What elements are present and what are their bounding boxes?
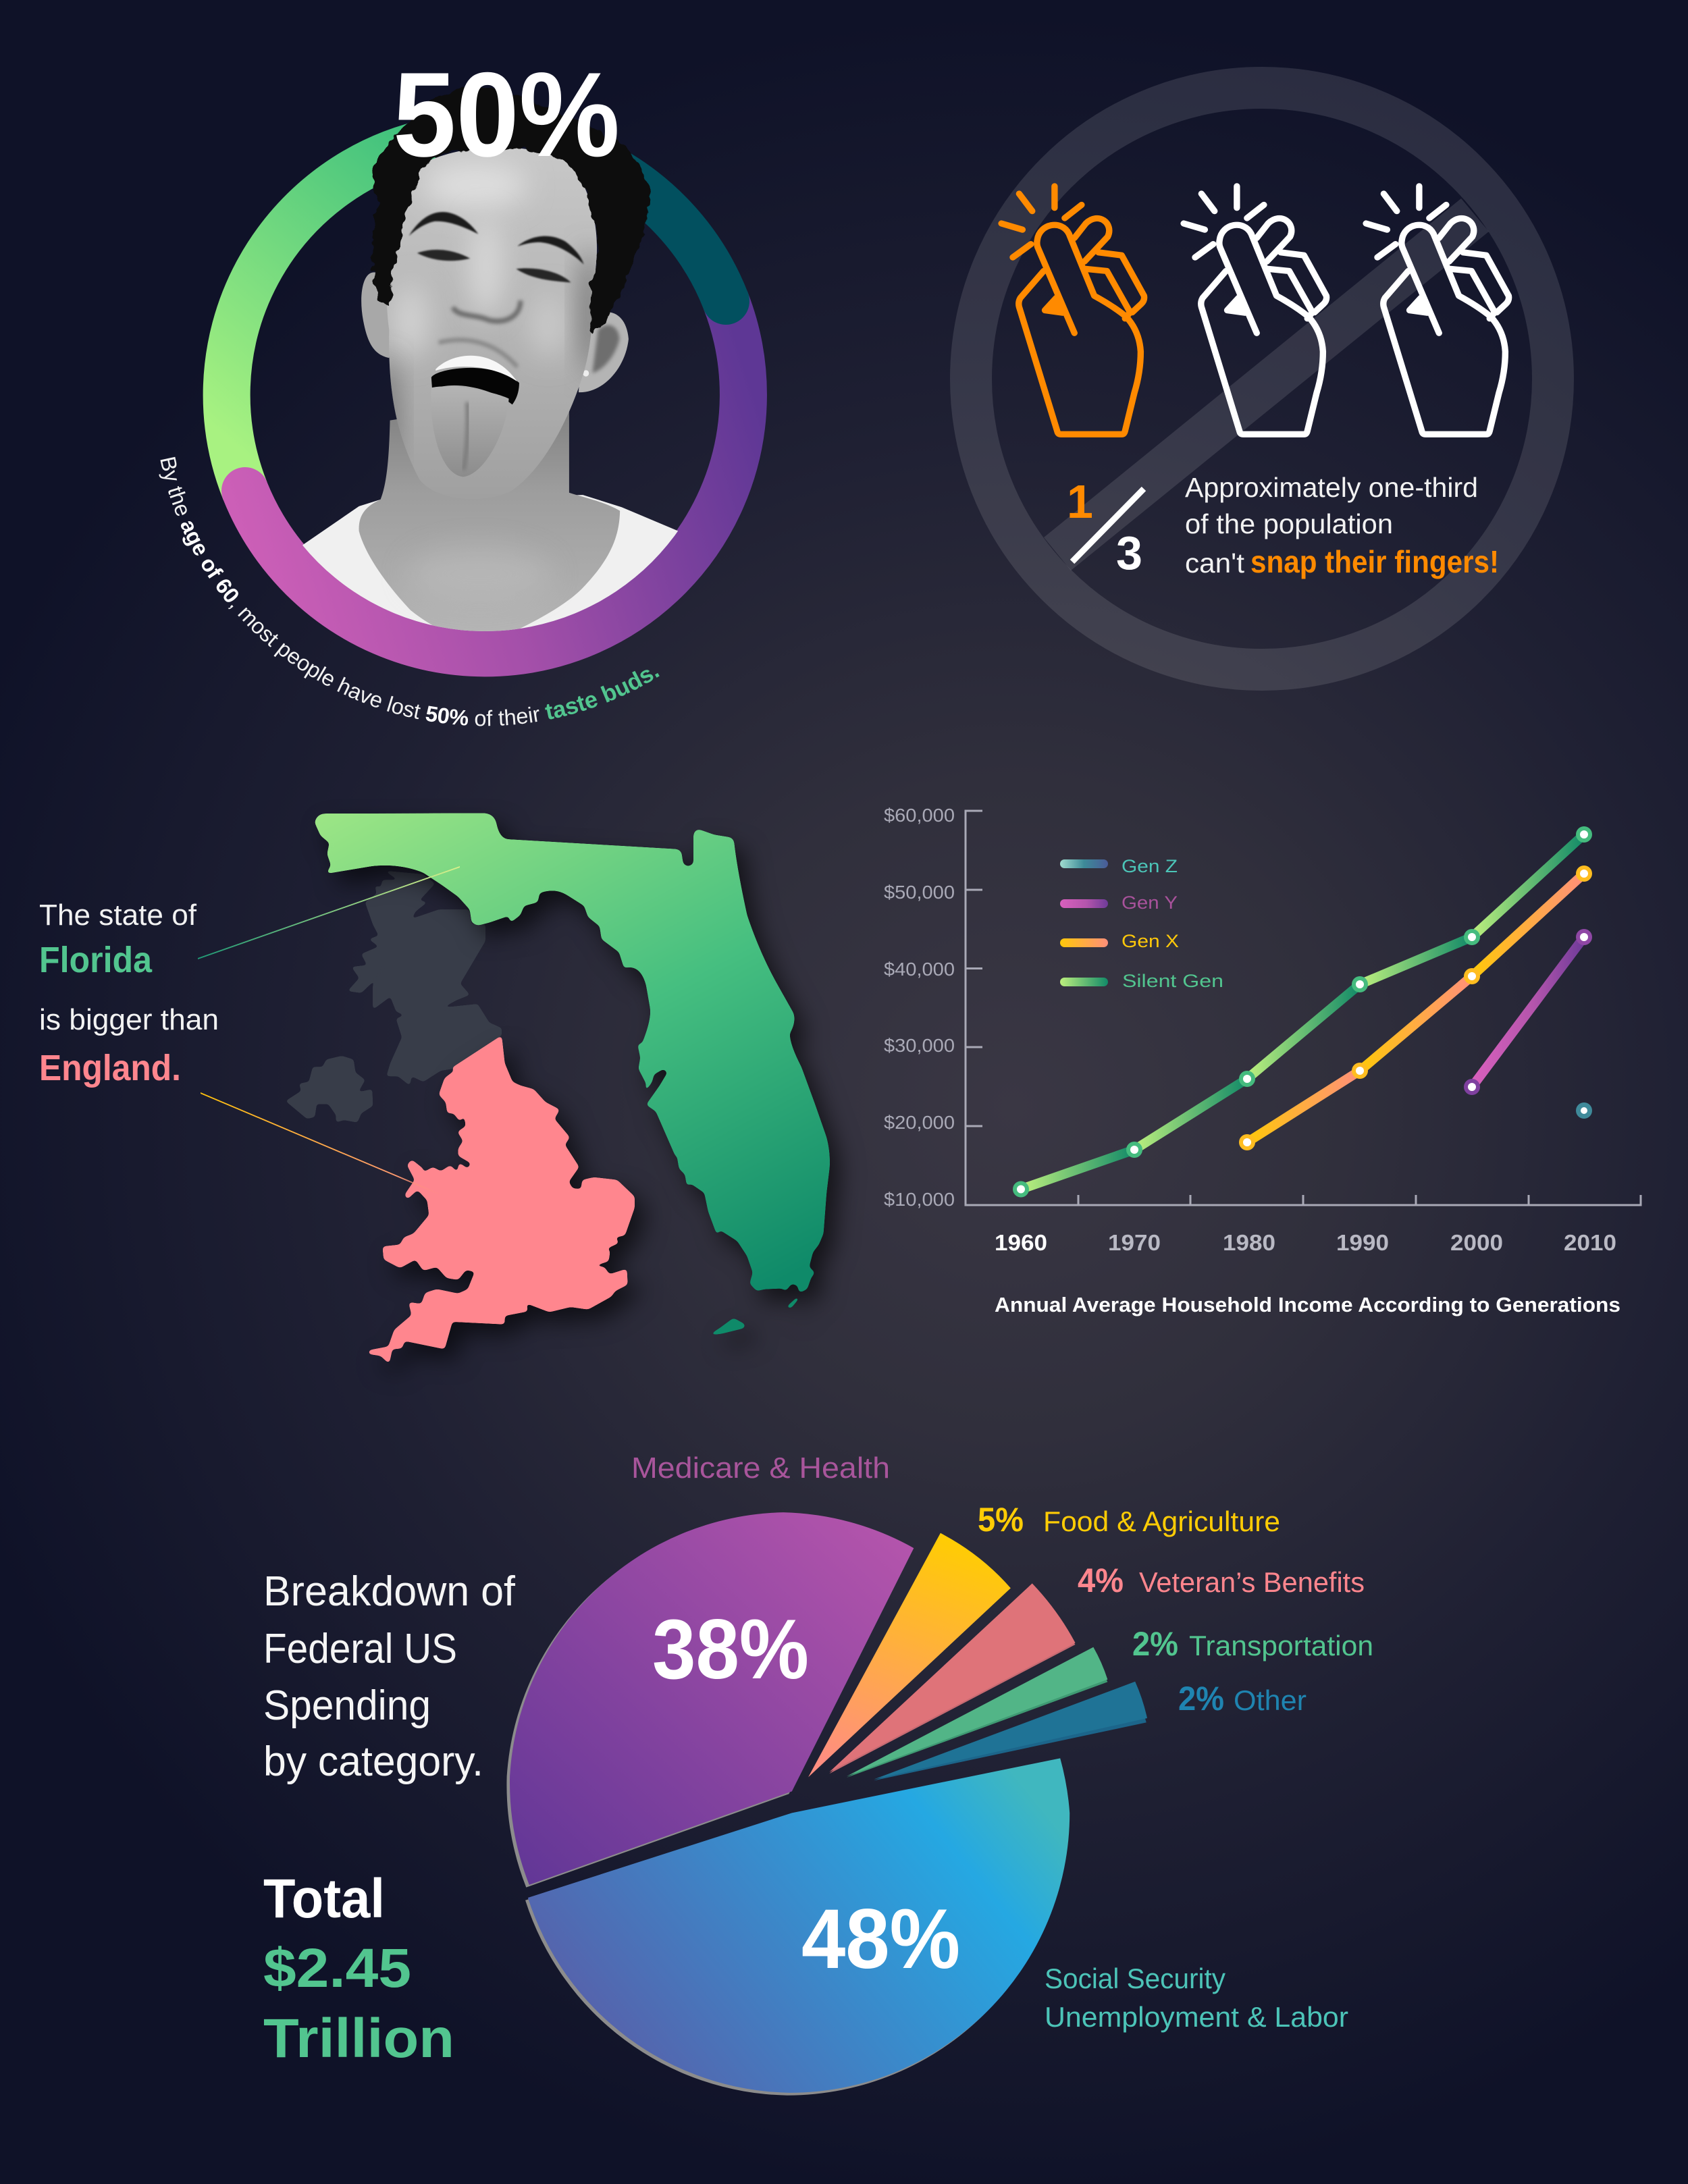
label: veterans: Veteran’s Benefits [1139, 1566, 1365, 1598]
icon: white snapping hand 2 [1184, 186, 1327, 434]
label: veterans [1078, 1562, 1365, 1599]
map: Florida [315, 814, 830, 1335]
text: Florida bigger than England: Florida [39, 940, 153, 980]
fraction one third: 3 [1116, 527, 1142, 579]
y axis labels [884, 805, 955, 1210]
label: social security [1045, 1963, 1348, 2033]
slice: food 5% [808, 1533, 1011, 1777]
line: Gen X [1239, 865, 1592, 1150]
text: spending heading: Spending [263, 1682, 431, 1729]
label: social security: Social Security [1045, 1963, 1225, 1994]
label: transportation: 2% [1132, 1625, 1178, 1663]
panel: federal spending pie [263, 1451, 1373, 2096]
text: total: Trillion [263, 2008, 454, 2069]
text: spending heading [263, 1568, 516, 1785]
chart title: Annual Average Household Income According to Generations [995, 1293, 1620, 1316]
text: spending heading: by category. [263, 1738, 483, 1785]
slice: veterans 4% [829, 1583, 1076, 1774]
label: other: Other [1234, 1684, 1307, 1716]
axes [966, 811, 1641, 1205]
line: Gen Y [1464, 929, 1592, 1095]
label: transportation: Transportation [1189, 1630, 1373, 1661]
pie chart [506, 1512, 1147, 2096]
map: England and Wales [368, 1036, 635, 1364]
fraction one third: 1 [1067, 475, 1093, 528]
panel: income line chart [884, 805, 1641, 1316]
portrait photo [282, 88, 704, 674]
panel: taste buds [159, 47, 767, 726]
text: spending heading: Breakdown of [263, 1568, 516, 1615]
text: Florida bigger than England: England. [39, 1048, 181, 1088]
label: food: 5% [978, 1501, 1024, 1539]
text: snap fact: can't [1185, 548, 1245, 579]
heading: 50%: 50% [393, 47, 620, 182]
value: 48%: 48% [801, 1892, 960, 1986]
legend: Gen Z [1122, 856, 1178, 876]
x axis labels: 1990 [1336, 1230, 1389, 1255]
text: Florida bigger than England: The state of [39, 899, 197, 932]
label: food: Food & Agriculture [1043, 1506, 1280, 1537]
hair [371, 88, 650, 334]
slice: transportation 2% [847, 1647, 1107, 1778]
y axis labels: $40,000 [884, 959, 955, 980]
text: total [263, 1868, 454, 2069]
label: medicare: Medicare & Health [631, 1451, 890, 1485]
label: social security: Unemployment & Labor [1045, 2001, 1348, 2033]
legend: Silent Gen [1122, 971, 1223, 991]
text: total: Total [263, 1868, 385, 1929]
line: Silent Gen [1013, 826, 1592, 1198]
donut ring [227, 142, 743, 653]
y axis labels: $30,000 [884, 1035, 955, 1056]
nose [453, 300, 521, 321]
y axis labels: $10,000 [884, 1189, 955, 1210]
icon: white snapping hand 3 [1366, 186, 1509, 434]
callout line: Florida [198, 866, 460, 959]
label: transportation [1132, 1625, 1373, 1663]
legend [1060, 856, 1223, 991]
label: other: 2% [1178, 1680, 1224, 1717]
tongue [431, 386, 509, 477]
slice: medicare 38% [506, 1512, 914, 1888]
label: veterans: 4% [1078, 1562, 1124, 1599]
y axis labels: $50,000 [884, 882, 955, 903]
fraction one third [1067, 475, 1144, 579]
mouth [431, 368, 519, 404]
text: snap fact: of the population [1185, 508, 1393, 539]
label: food [978, 1501, 1280, 1539]
y axis labels: $60,000 [884, 805, 955, 826]
text: Florida bigger than England [39, 899, 219, 1088]
legend: Gen Y [1122, 893, 1178, 913]
text: spending heading: Federal US [263, 1626, 457, 1672]
text: snap fact: snap their fingers! [1250, 544, 1499, 579]
slice: other 2% [874, 1682, 1147, 1780]
prohibition sign [971, 88, 1553, 670]
slice: social security 48% [525, 1758, 1070, 2096]
x axis labels: 2010 [1564, 1230, 1616, 1255]
x axis labels: 1960 [995, 1230, 1047, 1255]
x axis labels [995, 1230, 1616, 1255]
icon: orange snapping hand [1001, 186, 1144, 434]
x axis labels: 1970 [1108, 1230, 1161, 1255]
panel: Florida vs England map [39, 814, 830, 1364]
map: Great Britain north and Ireland [286, 871, 502, 1123]
text: Florida bigger than England: is bigger than [39, 1003, 219, 1036]
panel: finger snapping [971, 88, 1553, 670]
text: snap fact: Approximately one-third [1185, 472, 1478, 503]
y axis labels: $20,000 [884, 1112, 955, 1133]
eyebrows and eyes [409, 212, 478, 236]
value: 38%: 38% [652, 1603, 809, 1697]
callout line: England [201, 1092, 446, 1198]
label: other [1178, 1680, 1307, 1717]
x axis labels: 1980 [1223, 1230, 1275, 1255]
curved caption: By the age of 60, most people have lost 50% of their taste buds. [159, 456, 660, 726]
x axis labels: 2000 [1450, 1230, 1503, 1255]
legend: Gen X [1122, 931, 1179, 951]
text: total: $2.45 [263, 1938, 411, 1999]
point: Gen Z [1576, 1102, 1592, 1119]
text: snap fact [1185, 472, 1499, 579]
